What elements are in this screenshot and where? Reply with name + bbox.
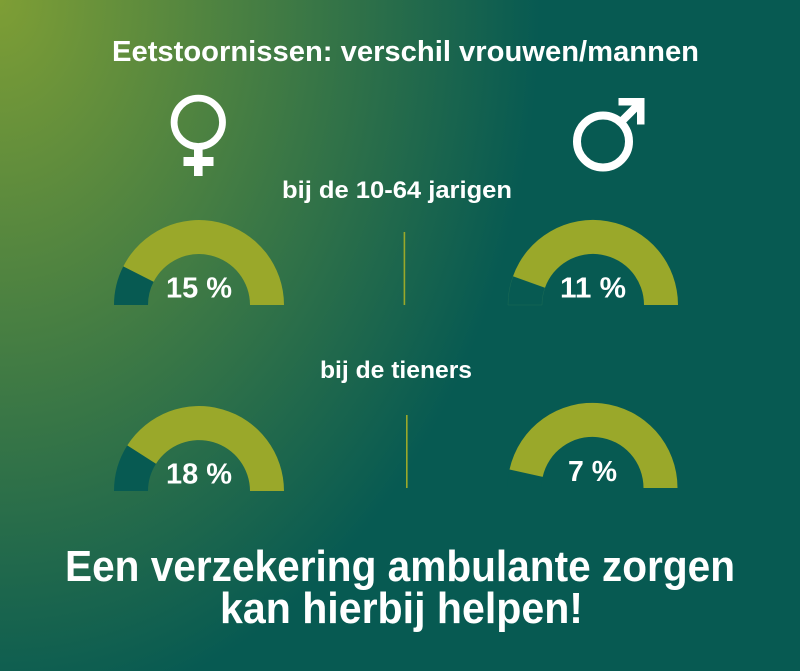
divider	[406, 415, 408, 488]
closing message	[65, 542, 735, 633]
icon: male symbol	[577, 98, 644, 168]
gauge: women teens, 18 %: 18 %	[166, 458, 232, 490]
gauge: women 10-64, 15 %: 15 %	[166, 272, 232, 304]
gauge: women teens, 18 %	[114, 406, 284, 491]
subheading: 10-64 jarigen: bij de 10-64 jarigen	[282, 177, 512, 204]
gauge: women 10-64, 15 %	[114, 220, 284, 305]
gauge: men teens, 7 %	[507, 403, 678, 488]
closing message: kan hierbij helpen!	[220, 584, 583, 633]
gauge: men 10-64, 11 %: 11 %	[560, 272, 626, 304]
title: Eetstoornissen: verschil vrouwen/mannen	[112, 36, 699, 68]
closing message: Een verzekering ambulante zorgen	[65, 542, 735, 591]
gauge: men teens, 7 %: 7 %	[568, 456, 617, 488]
divider	[404, 232, 405, 305]
icon: female symbol	[174, 98, 222, 176]
subheading: tieners: bij de tieners	[320, 357, 472, 384]
gauge: men 10-64, 11 %	[508, 220, 678, 305]
